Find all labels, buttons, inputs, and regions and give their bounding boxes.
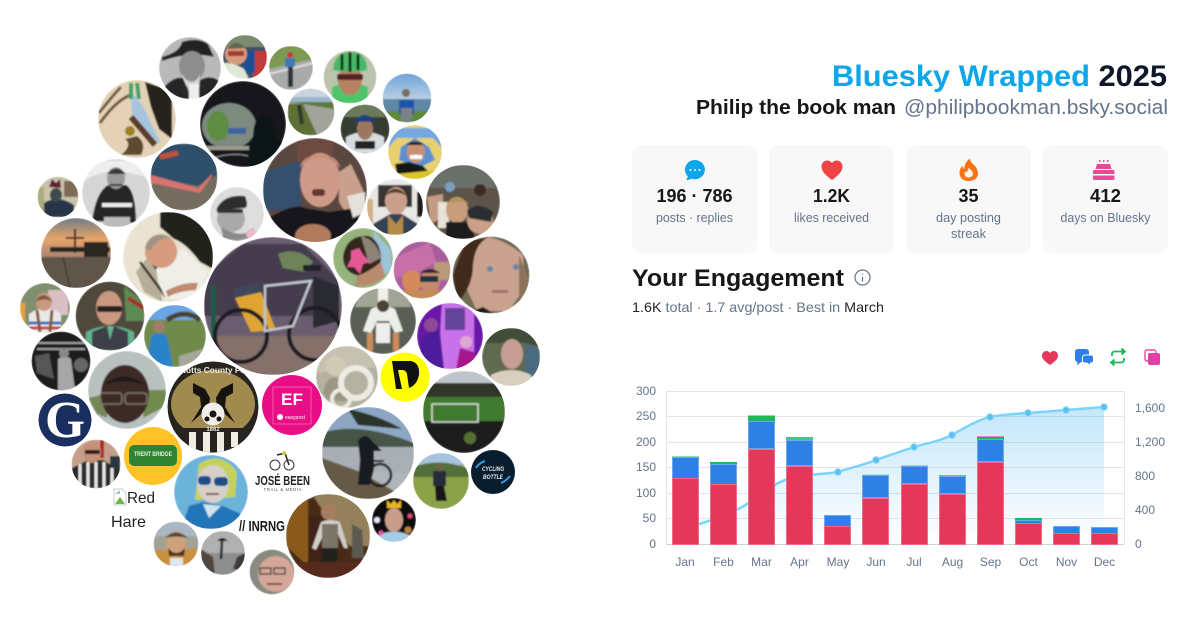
bars: blue replies bbox=[672, 422, 1118, 534]
left axis labels: 50 bbox=[643, 511, 656, 525]
broken image: Red Hare: Red bbox=[127, 490, 155, 507]
stat card: day posting streak: 35 bbox=[958, 186, 978, 206]
icon: heart bbox=[822, 160, 842, 180]
month labels bbox=[675, 555, 1115, 569]
month labels: Nov bbox=[1056, 555, 1077, 569]
logo: Jose Been: JOSÉ BEEN bbox=[255, 473, 310, 488]
icon: legend quotes bbox=[1145, 350, 1160, 365]
avatar: man in suit waistcoat bbox=[286, 494, 370, 578]
avatar: Cycling Bottle logo bbox=[471, 450, 515, 494]
avatar: easypost logo: EF bbox=[281, 390, 303, 409]
avatar: woman portrait bbox=[452, 236, 530, 314]
subtitle: user name and handle: Philip the book man bbox=[696, 97, 896, 119]
avatar: vintage cyclist bbox=[82, 159, 150, 227]
month labels: Dec bbox=[1094, 555, 1115, 569]
avatar: bearded man in cap bbox=[154, 522, 198, 566]
avatar: Notts County badge: Notts County FC bbox=[180, 366, 246, 375]
avatar: Trent Bridge logo bbox=[124, 427, 182, 485]
subtitle: user name and handle bbox=[696, 97, 1168, 119]
right axis labels: 1,200 bbox=[1135, 435, 1165, 449]
bars: pink quotes bbox=[901, 436, 1004, 466]
icon: flame bbox=[960, 158, 978, 181]
stat card: day posting streak: streak bbox=[951, 227, 987, 241]
avatar: couple under pink flowers bbox=[394, 242, 450, 298]
left axis labels: 100 bbox=[636, 486, 656, 500]
avatar: tunnel view bbox=[200, 81, 286, 167]
avatar: man with bike at lake bbox=[322, 407, 414, 499]
avatar: main portrait in crowd bbox=[263, 138, 367, 248]
title: Bluesky Wrapped 2025 bbox=[832, 60, 1167, 93]
avatar: baby sepia photo bbox=[316, 346, 378, 408]
stat card: posts and replies: 196 · 786 bbox=[656, 186, 732, 206]
icon: birthday cake bbox=[1093, 160, 1114, 180]
icon: legend replies bbox=[1075, 349, 1094, 366]
avatar: purple poster bbox=[417, 303, 483, 369]
month labels: Jul bbox=[906, 555, 922, 569]
avatar: football stadium bbox=[423, 371, 505, 453]
left axis labels: 0 bbox=[649, 537, 656, 551]
avatar: man in garden bbox=[482, 328, 540, 386]
avatar: rider in rainbow jersey bbox=[20, 283, 70, 333]
avatar: touring bike with yellow panniers bbox=[204, 237, 342, 375]
avatar: Trent Bridge logo: TRENT BRIDGE bbox=[134, 452, 172, 458]
logo: Jose Been bbox=[255, 451, 310, 492]
logo: Jose Been: TRAIL & MEDIA bbox=[264, 487, 302, 492]
avatar: cyclocross crowd bbox=[150, 144, 218, 210]
avatar: rider in white kit on bike bbox=[350, 288, 416, 354]
avatar: easypost logo bbox=[262, 375, 322, 435]
icon: chat bubble bbox=[685, 160, 705, 180]
avatar: rider in yellow kit bbox=[388, 125, 442, 179]
month labels: Apr bbox=[790, 555, 809, 569]
left axis labels bbox=[636, 384, 656, 551]
combo chart: monthly engagement bbox=[636, 384, 1165, 569]
avatar: sunset jetty bbox=[41, 218, 111, 288]
left axis labels: 200 bbox=[636, 435, 656, 449]
avatar: pink flower in hair bbox=[333, 228, 393, 288]
avatar: blue portrait painting bbox=[174, 455, 248, 529]
avatar: yellow D logo bbox=[380, 352, 430, 402]
bars: green reposts bbox=[672, 416, 1042, 520]
avatar: man with crown bbox=[38, 176, 78, 218]
stat card: likes received: 1.2K bbox=[813, 186, 850, 206]
month labels: Sep bbox=[980, 555, 1001, 569]
avatar: man in blue shirt with view bbox=[144, 305, 206, 367]
right axis labels: 800 bbox=[1135, 469, 1155, 483]
avatar: old man in hat bbox=[159, 37, 221, 99]
stat card: day posting streak: day posting bbox=[936, 211, 1001, 225]
avatar: rider in green helmet bbox=[324, 50, 376, 104]
right axis labels: 1,600 bbox=[1135, 401, 1165, 415]
icon: legend heart bbox=[1042, 351, 1058, 365]
avatar: young man in suit bbox=[367, 179, 423, 235]
avatar: Notts County badge bbox=[168, 362, 258, 453]
avatar: rider in blue helmet bbox=[340, 104, 390, 154]
right axis labels bbox=[1135, 401, 1165, 551]
stat card: likes received: likes received bbox=[794, 211, 869, 225]
avatar: crowd selfie bbox=[426, 165, 500, 239]
stat card: posts and replies bbox=[632, 145, 757, 253]
avatar: black and white wedding bbox=[32, 332, 90, 390]
stat card: likes received bbox=[769, 145, 894, 253]
stat card: posts and replies: posts · replies bbox=[656, 211, 733, 225]
broken image: Red Hare: Hare bbox=[111, 514, 146, 531]
avatar: easypost logo: easypost bbox=[285, 415, 306, 421]
avatar: Cycling Bottle logo: CYCLING bbox=[482, 466, 504, 473]
month labels: Jan bbox=[675, 555, 695, 569]
cumulative area bbox=[685, 407, 1104, 544]
icon: legend reposts bbox=[1111, 348, 1125, 366]
gridlines and axes bbox=[666, 391, 1124, 544]
left axis labels: 150 bbox=[636, 460, 656, 474]
month labels: May bbox=[827, 555, 849, 569]
avatar: Cycling Bottle logo: BOTTLE bbox=[483, 474, 504, 481]
stat card: days on Bluesky: 412 bbox=[1090, 186, 1121, 206]
avatar: man by the sea bbox=[382, 74, 432, 122]
month labels: Mar bbox=[751, 555, 772, 569]
avatar: man in striped shirt bbox=[72, 440, 120, 488]
left axis labels: 250 bbox=[636, 409, 656, 423]
stat card: days on Bluesky: days on Bluesky bbox=[1060, 211, 1151, 225]
avatar: Notts County badge: 1862 bbox=[206, 427, 220, 433]
right axis labels: 0 bbox=[1135, 537, 1142, 551]
avatar: woman in cap bbox=[210, 187, 264, 241]
chart legend bbox=[1042, 348, 1160, 366]
avatar: man in white polo bbox=[123, 212, 213, 302]
logo: INRNG: // INRNG bbox=[239, 518, 285, 535]
heading: Your Engagement: Your Engagement bbox=[632, 265, 844, 292]
left axis labels: 300 bbox=[636, 384, 656, 398]
broken image: Red Hare bbox=[111, 489, 155, 531]
bars: red likes bbox=[672, 450, 1118, 544]
avatar: umbrella silhouette bbox=[201, 531, 245, 575]
avatar: man with glasses and waistcoat bbox=[76, 282, 144, 350]
avatar: road and grass bbox=[288, 88, 334, 136]
avatar: runner in field bbox=[413, 453, 469, 509]
right axis labels: 400 bbox=[1135, 503, 1155, 517]
avatar: budgie on perch bbox=[98, 80, 176, 158]
month labels: Aug bbox=[942, 555, 963, 569]
avatar cluster bbox=[20, 35, 540, 594]
month labels: Feb bbox=[713, 555, 734, 569]
engagement summary: 1.6K total · 1.7 avg/post · Best in March bbox=[632, 299, 884, 315]
avatar: bald man in glasses bbox=[250, 550, 294, 594]
month labels: Oct bbox=[1019, 555, 1038, 569]
stat card: days on Bluesky bbox=[1043, 145, 1168, 253]
stat card: day posting streak bbox=[906, 145, 1031, 253]
month labels: Jun bbox=[866, 555, 886, 569]
avatar: emoji king bbox=[372, 498, 416, 542]
cumulative line bbox=[685, 407, 1104, 529]
avatar: man with dark glasses bbox=[88, 351, 166, 429]
avatar: cyclist on road bbox=[269, 46, 313, 90]
icon: info bbox=[855, 270, 870, 285]
avatar: man with sunglasses bbox=[223, 35, 267, 79]
subtitle: user name and handle: @philipbookman.bsky.social bbox=[904, 97, 1168, 119]
avatar: G logo: G bbox=[45, 392, 85, 449]
